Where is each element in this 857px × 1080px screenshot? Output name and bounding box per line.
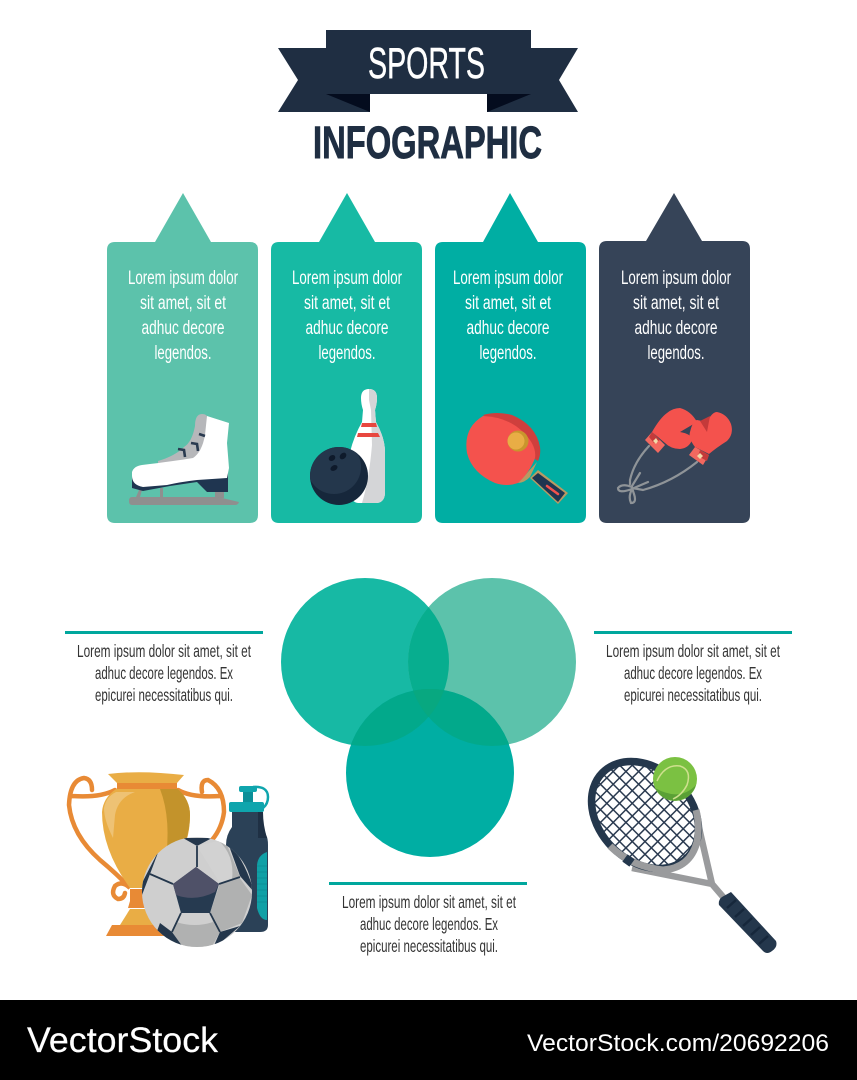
footer brand: VectorStock xyxy=(27,1021,219,1060)
banner centre xyxy=(326,30,531,94)
card text: legendos. xyxy=(154,343,212,364)
text block: left: epicurei necessitatibus qui. xyxy=(95,685,233,705)
card text: adhuc decore xyxy=(142,318,224,339)
card text: sit amet, sit et xyxy=(304,293,391,314)
card text: adhuc decore xyxy=(634,318,718,339)
card text: Lorem ipsum dolor xyxy=(621,268,731,289)
card text: Lorem ipsum dolor xyxy=(292,268,402,289)
panel: boxing xyxy=(599,193,750,523)
icon: trophy xyxy=(69,772,224,936)
card text: Lorem ipsum dolor xyxy=(453,268,563,289)
card text: Lorem ipsum dolor xyxy=(128,268,238,289)
text block: bottom: adhuc decore legendos. Ex xyxy=(360,914,498,934)
card text: adhuc decore xyxy=(306,318,388,339)
icon: trophy, ball and bottle xyxy=(69,772,268,950)
card text xyxy=(128,268,238,364)
icon: boxing gloves xyxy=(618,408,732,503)
text block: bottom: Lorem ipsum dolor sit amet, sit et xyxy=(342,892,516,912)
icon: table tennis paddle xyxy=(466,413,568,504)
text block: right: epicurei necessitatibus qui. xyxy=(624,685,762,705)
frame accent xyxy=(625,858,632,863)
card text: legendos. xyxy=(318,343,376,364)
footer url: VectorStock.com/20692206 xyxy=(527,1030,829,1057)
panel: bowling xyxy=(271,193,422,523)
overlap: centre xyxy=(414,689,444,716)
venn diagram xyxy=(281,578,576,857)
card text: legendos. xyxy=(480,343,536,364)
card background xyxy=(599,193,750,523)
text block: left xyxy=(65,631,263,705)
overlap: top xyxy=(408,607,449,690)
icon: bowling pin and ball xyxy=(307,389,385,505)
racket head xyxy=(570,740,720,890)
card text: sit amet, sit et xyxy=(140,293,227,314)
card text: legendos. xyxy=(648,343,704,364)
icon: soccer ball xyxy=(141,837,254,950)
circle: top right xyxy=(408,578,576,746)
text block: right: Lorem ipsum dolor sit amet, sit et xyxy=(606,641,780,661)
panel: table tennis xyxy=(435,193,586,523)
text block: right xyxy=(594,631,792,705)
footer bar xyxy=(0,1000,857,1080)
circle: bottom xyxy=(346,689,514,857)
card background xyxy=(271,193,422,523)
text block: left: Lorem ipsum dolor sit amet, sit et xyxy=(77,641,251,661)
card text: sit amet, sit et xyxy=(633,293,720,314)
icon: ice skate xyxy=(129,414,239,505)
banner tails xyxy=(278,48,578,112)
racket lower frame xyxy=(610,810,698,870)
text block: bottom xyxy=(329,882,527,956)
card background xyxy=(435,193,586,523)
card background xyxy=(107,193,258,523)
card text: sit amet, sit et xyxy=(465,293,552,314)
card text: adhuc decore xyxy=(466,318,550,339)
card text xyxy=(453,268,563,364)
icon: water bottle xyxy=(226,786,268,932)
tennis ball xyxy=(653,757,697,801)
panel: ice skating xyxy=(107,193,258,523)
racket shaft xyxy=(632,806,724,898)
overlap: bottom left xyxy=(350,691,428,746)
overlap: bottom right xyxy=(428,690,509,746)
title banner xyxy=(278,30,578,112)
heading: infographic: INFOGRAPHIC xyxy=(313,117,542,168)
icon: tennis racket and ball xyxy=(570,740,776,953)
card text xyxy=(292,268,402,364)
heading: sports: SPORTS xyxy=(368,39,485,88)
text block: right: adhuc decore legendos. Ex xyxy=(624,663,762,683)
racket handle xyxy=(719,892,776,953)
card text xyxy=(621,268,731,364)
text block: bottom: epicurei necessitatibus qui. xyxy=(360,936,498,956)
text block: left: adhuc decore legendos. Ex xyxy=(95,663,233,683)
banner folds xyxy=(326,94,531,112)
circle: top left xyxy=(281,578,449,746)
